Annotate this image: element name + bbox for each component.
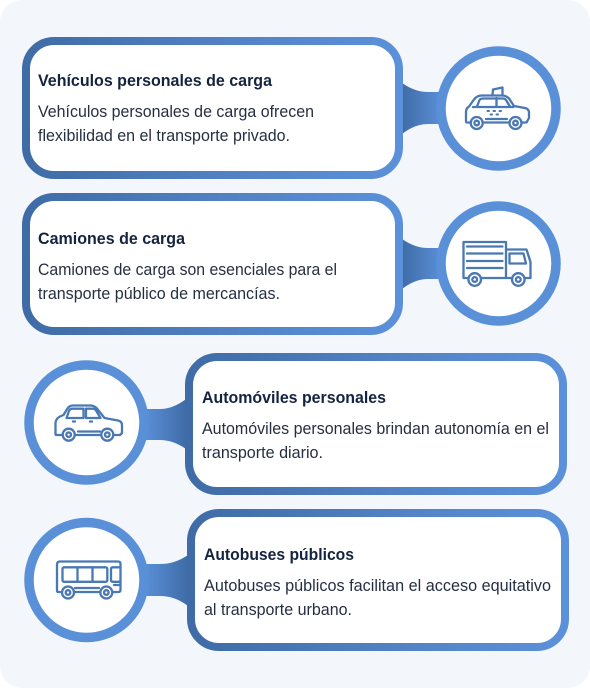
- body text: al transporte urbano.: [204, 601, 352, 619]
- icon circle: [441, 206, 556, 321]
- body text: flexibilidad en el transporte privado.: [38, 127, 290, 145]
- panel: Automóviles personales: [29, 357, 563, 491]
- panel: Camiones de carga: [26, 197, 556, 331]
- panel: Vehículos personales de carga: [26, 41, 556, 175]
- body text: Vehículos personales de carga ofrecen: [38, 103, 314, 121]
- heading: Vehículos personales de carga: [38, 72, 273, 90]
- icon: truck: [464, 242, 530, 286]
- icon circle: [29, 365, 144, 480]
- body text: Autobuses públicos facilitan el acceso equitativo: [204, 577, 551, 595]
- text card: [26, 41, 399, 175]
- text card: [189, 357, 563, 491]
- connector: [402, 83, 442, 134]
- text card: [26, 197, 399, 331]
- body text: transporte diario.: [202, 444, 323, 462]
- heading: Automóviles personales: [202, 389, 386, 407]
- icon: taxi: [466, 88, 529, 129]
- body text: transporte público de mercancías.: [38, 285, 280, 303]
- icon: car: [56, 406, 122, 441]
- connector: [402, 239, 442, 289]
- body text: Camiones de carga son esenciales para el: [38, 261, 337, 279]
- body text: Automóviles personales brindan autonomía en el: [202, 420, 549, 438]
- icon: bus: [57, 562, 120, 598]
- panel: Autobuses públicos: [29, 513, 565, 647]
- connector: [145, 555, 188, 606]
- text card: [191, 513, 565, 647]
- icon circle: [29, 522, 144, 638]
- heading: Camiones de carga: [38, 230, 186, 248]
- icon circle: [441, 51, 556, 166]
- connector: [145, 399, 186, 449]
- heading: Autobuses públicos: [204, 546, 354, 564]
